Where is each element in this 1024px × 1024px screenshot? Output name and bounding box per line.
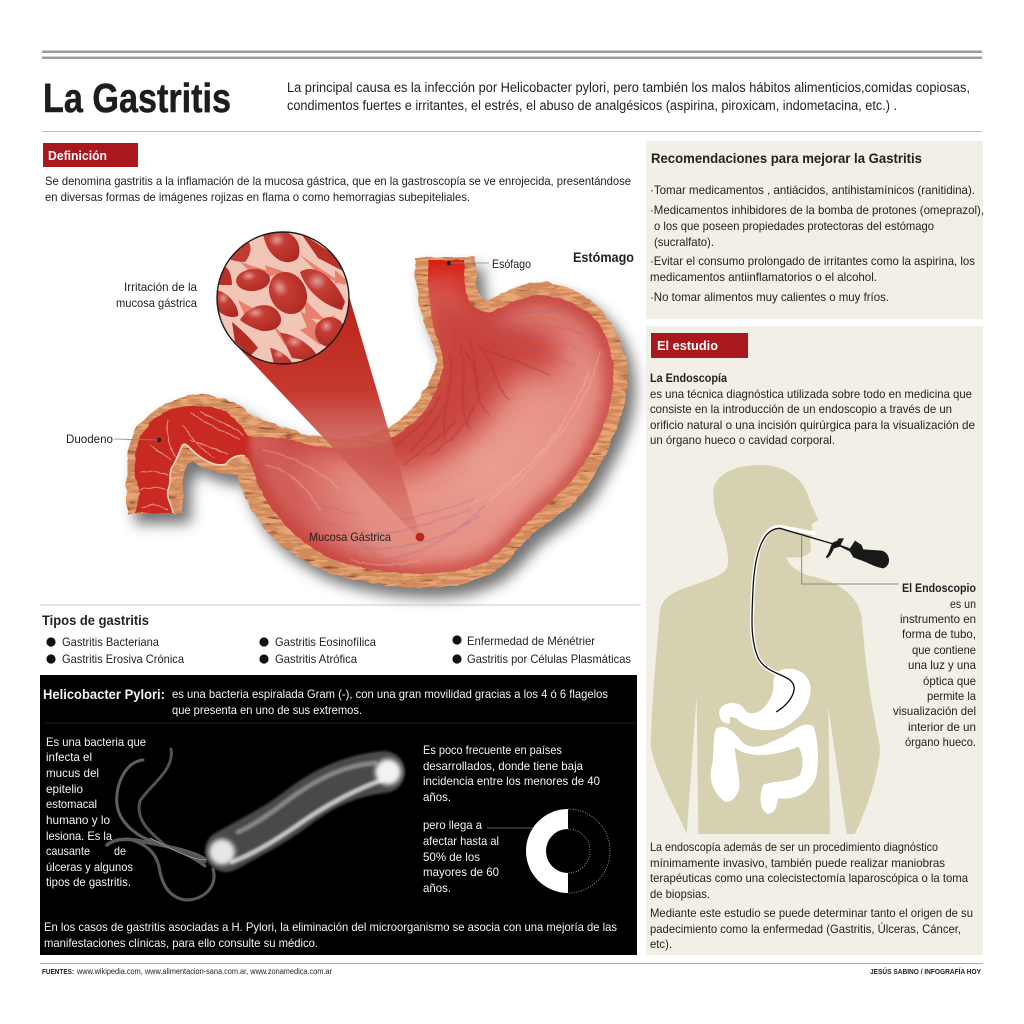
closing note: manifestaciones clínicas, para ello consulte su médico. [44, 936, 318, 950]
endoscope tube [752, 527, 837, 712]
stomach labels: Mucosa Gástrica [309, 530, 391, 544]
endoscope handle [826, 538, 889, 568]
types of gastritis: Gastritis Erosiva Crónica [62, 652, 184, 666]
endoscopy definition: La Endoscopía [650, 371, 727, 385]
stomach labels: Duodeno [66, 432, 113, 446]
panel: recommendations: medicamentos antiinflamatorios o el alcohol. [650, 270, 877, 284]
bacteria description text: humano y lo [46, 813, 110, 827]
incidence text: afectar hasta al [423, 834, 499, 848]
endoscopy definition: orificio natural o una incisión quirúrgica para la visualización de [650, 418, 975, 432]
panel: recommendations: ·No tomar alimentos muy calientes o muy fríos. [650, 290, 889, 304]
study closing text: de biopsias. [650, 887, 710, 901]
types of gastritis: Enfermedad de Ménétrier [467, 634, 595, 648]
incidence text: 50% de los [423, 850, 480, 864]
pylorus cream edge [168, 444, 245, 513]
badge: El estudio: El estudio [657, 338, 718, 353]
panel: recommendations: ·Evitar el consumo prolongado de irritantes como la aspirina, los [650, 254, 975, 268]
closing note [44, 920, 617, 950]
study closing text: etc). [650, 937, 672, 951]
badge: Definición [43, 143, 138, 167]
gastric folds [395, 340, 550, 465]
types of gastritis: Gastritis Atrófica [275, 652, 357, 666]
digestive organs [711, 669, 818, 814]
el endoscopio text: órgano hueco. [905, 735, 976, 749]
stomach mucosa interior [134, 260, 614, 574]
panel: el estudio [646, 326, 983, 955]
incidence text: incidencia entre los menores de 40 [423, 774, 600, 788]
badge: El estudio [651, 333, 748, 358]
magnification cone [237, 296, 420, 537]
panel: Helicobacter Pylori: que presenta en uno de sus extremos. [172, 703, 362, 717]
endoscopy definition: un órgano hueco o cavidad corporal. [650, 433, 835, 447]
el endoscopio text: forma de tubo, [902, 627, 976, 641]
el endoscopio text: El Endoscopio [902, 581, 976, 595]
panel: recommendations: (sucralfato). [654, 235, 714, 249]
panel: recommendations [646, 141, 984, 319]
el endoscopio text: óptica que [923, 674, 976, 688]
mucosa dot [416, 533, 424, 541]
bacteria description text: mucus del [46, 766, 99, 780]
stomach labels: Irritación de la [124, 280, 197, 294]
endoscopy definition [650, 371, 975, 447]
illustration: stomach [114, 230, 640, 598]
types of gastritis [40, 605, 641, 666]
bacteria description text: Es una bacteria que [46, 735, 146, 749]
incidence text [423, 743, 600, 895]
footer: FUENTES: [42, 967, 74, 976]
study closing text: Mediante este estudio se puede determinar tanto el origen de su [650, 906, 973, 920]
incidence text: desarrollados, donde tiene baja [423, 759, 583, 773]
intro text: condimentos fuertes e irritantes, el estrés, el abuso de analgésicos (aspirina, piroxicam, indometacina, etc.) . [287, 98, 897, 113]
closing note: En los casos de gastritis asociadas a H. Pylori, la eliminación del microorganismo se asocia con una mejoría de las [44, 920, 617, 934]
bacteria description text: tipos de gastritis. [46, 875, 131, 889]
study closing text [650, 840, 973, 951]
panel: Helicobacter Pylori: Helicobacter Pylori: [43, 686, 165, 702]
footer [40, 963, 983, 976]
magnified lens: irritated mucosa [214, 230, 352, 368]
duodenum dot [157, 438, 161, 442]
panel: recommendations: ·Medicamentos inhibidores de la bomba de protones (omeprazol), [650, 203, 984, 217]
bacterium illustration [107, 749, 401, 900]
intro text: La principal causa es la infección por Helicobacter pylori, pero también los malos hábitos alimenticios,comidas copiosas, [287, 80, 970, 95]
panel: Helicobacter Pylori: es una bacteria espiralada Gram (-), con una gran movilidad gracias a los 4 ó 6 flagelos [172, 687, 608, 701]
incidence text: mayores de 60 [423, 865, 499, 879]
types of gastritis: Tipos de gastritis [42, 612, 149, 628]
el endoscopio text: visualización del [893, 704, 976, 718]
definition text: en diversas formas de imágenes rojizas en flama o como hemorragias subepiteliales. [45, 190, 470, 204]
el endoscopio text: es un [950, 597, 976, 611]
footer: JESÚS SABINO / INFOGRAFÍA HOY [870, 967, 981, 976]
incidence text: Es poco frecuente en países [423, 743, 562, 757]
bacteria description text: úlceras y algunos [46, 860, 133, 874]
panel: recommendations: o los que poseen propiedades protectoras del estómago [654, 219, 934, 233]
study closing text: mínimamente invasivo, también puede realizar maniobras [650, 856, 945, 870]
el endoscopio text: interior de un [908, 720, 976, 734]
panel: recommendations: ·Tomar medicamentos , antiácidos, antihistamínicos (ranitidina). [650, 183, 975, 197]
leader line [802, 536, 898, 584]
el endoscopio text: una luz y una [908, 658, 976, 672]
badge: Definición: Definición [48, 149, 107, 163]
stomach labels: mucosa gástrica [116, 296, 197, 310]
study closing text: terapéuticas como una colecistectomía laparoscópica o la toma [650, 871, 968, 885]
bacteria description text: infecta el [46, 750, 92, 764]
stomach labels [66, 249, 634, 544]
incidence text: pero llega a [423, 818, 482, 832]
bacteria description text: epitelio [46, 782, 83, 796]
header rules [42, 50, 982, 132]
intro text [287, 80, 970, 113]
definition text [45, 174, 631, 204]
el endoscopio text: que contiene [912, 643, 976, 657]
el endoscopio text: permite la [927, 689, 976, 703]
stomach outer wall [127, 257, 627, 588]
esophagus dot [447, 261, 451, 265]
bacteria description text [46, 735, 146, 889]
definition text: Se denomina gastritis a la inflamación de la mucosa gástrica, que en la gastroscopía se ve enrojecida, presentándose [45, 174, 631, 188]
study closing text: La endoscopía además de ser un procedimiento diagnóstico [650, 840, 938, 854]
el endoscopio text: instrumento en [900, 612, 976, 626]
types of gastritis: Gastritis por Células Plasmáticas [467, 652, 631, 666]
title: La Gastritis [43, 75, 231, 121]
endoscopy definition: consiste en la introducción de un endoscopio a través de un [650, 402, 952, 416]
bacteria description text: lesiona. Es la [46, 829, 112, 843]
endoscopy definition: es una técnica diagnóstica utilizada sobre todo en medicina que [650, 387, 972, 401]
bacteria description text: estomacal [46, 797, 97, 811]
stomach labels: Estómago [573, 249, 634, 265]
el endoscopio text [893, 581, 976, 749]
types of gastritis: Gastritis Eosinofílica [275, 635, 376, 649]
footer: www.wikipedia.com, www.alimentacion-sana.com.ar, www.zonamedica.com.ar [76, 967, 332, 976]
donut chart: 50% [487, 809, 610, 893]
stomach shadow [135, 267, 635, 598]
stomach labels: Esófago [492, 257, 531, 271]
body silhouette with endoscope [651, 465, 898, 834]
incidence text: años. [423, 790, 451, 804]
study closing text: padecimiento como la enfermedad (Gastritis, Úlceras, Cáncer, [650, 921, 961, 936]
panel: recommendations: Recomendaciones para mejorar la Gastritis [651, 150, 922, 166]
silhouette [651, 465, 880, 834]
bacteria description text: de [114, 844, 126, 858]
panel: Helicobacter Pylori [40, 675, 637, 955]
incidence text: años. [423, 881, 451, 895]
bacteria description text: causante [46, 844, 90, 858]
types of gastritis: Gastritis Bacteriana [62, 635, 159, 649]
